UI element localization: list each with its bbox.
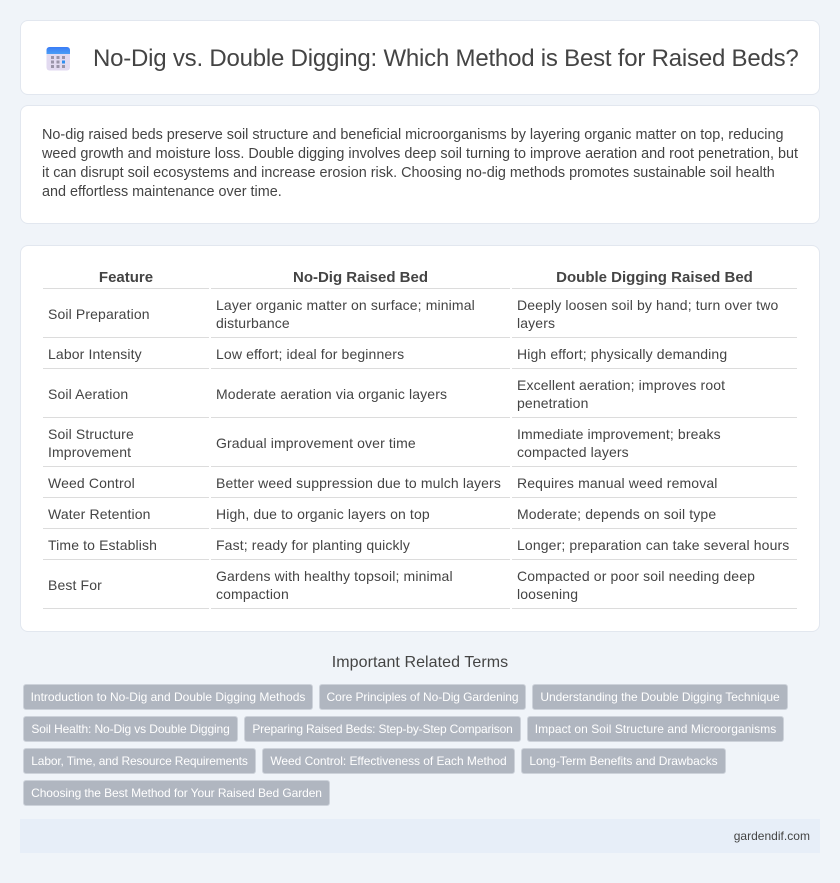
chip: Soil Health: No-Dig vs Double Digging [31, 722, 230, 736]
comparison table: Gradual improvement over time [216, 435, 416, 451]
comparison table: Longer; preparation can take several hours [517, 537, 789, 553]
chip [23, 716, 238, 742]
intro paragraph: it can disrupt soil ecosystems and increase erosion risk. Choosing no-dig methods promotes sustainable soil health [42, 165, 775, 181]
chip: Preparing Raised Beds: Step-by-Step Comparison [252, 722, 513, 736]
row: Soil Structure Improvement [48, 426, 134, 460]
row: Water Retention: Water Retention [48, 506, 151, 522]
chip: Understanding the Double Digging Technique [540, 690, 780, 704]
comparison table: compaction [216, 586, 289, 602]
intro card [20, 105, 820, 224]
comparison table: Immediate improvement; breaks [517, 426, 721, 442]
chip: Long-Term Benefits and Drawbacks [529, 754, 718, 768]
comparison table: Requires manual weed removal [517, 475, 718, 491]
comparison table: Low effort; ideal for beginners [216, 346, 404, 362]
intro paragraph [42, 127, 798, 200]
row: Weed Control: Weed Control [48, 475, 135, 491]
header card [20, 20, 820, 95]
footer bar [20, 819, 820, 853]
comparison table: Compacted or poor soil needing deep [517, 568, 755, 584]
chip: Labor, Time, and Resource Requirements [31, 754, 248, 768]
comparison table [43, 269, 797, 609]
chip [244, 716, 521, 742]
comparison table: loosening [517, 586, 578, 602]
title: No-Dig vs. Double Digging: Which Method is Best for Raised Beds? [93, 45, 799, 72]
row: Soil Structure Improvement: Soil Structure [48, 426, 134, 442]
intro paragraph: weed growth and moisture loss. Double digging involves deep soil turning to improve aeration and root penetration, but [42, 146, 798, 162]
comparison table: Excellent aeration; improves root [517, 377, 725, 393]
chip: Core Principles of No-Dig Gardening [327, 690, 518, 704]
chip [532, 684, 788, 710]
intro paragraph: No-dig raised beds preserve soil structure and beneficial microorganisms by layering organic matter on top, reducing [42, 127, 783, 143]
column header: No-Dig Raised Bed: No-Dig Raised Bed [293, 269, 428, 286]
chip [23, 748, 256, 774]
comparison table: Deeply loosen soil by hand; turn over two [517, 297, 778, 313]
chip [319, 684, 526, 710]
column header: Feature: Feature [99, 269, 153, 286]
chip [262, 748, 515, 774]
row: Labor Intensity: Labor Intensity [48, 346, 142, 362]
row: Best For: Best For [48, 577, 102, 593]
comparison table: layers [517, 315, 555, 331]
chip [521, 748, 726, 774]
chip: Weed Control: Effectiveness of Each Method [270, 754, 507, 768]
chip [23, 684, 313, 710]
footer source: gardendif.com [734, 829, 810, 843]
comparison table: compacted layers [517, 444, 629, 460]
chip: Introduction to No-Dig and Double Digging Methods [31, 690, 305, 704]
icon: calendar [46, 47, 70, 70]
comparison table: Better weed suppression due to mulch layers [216, 475, 501, 491]
row: Soil Structure Improvement: Improvement [48, 444, 131, 460]
comparison table: penetration [517, 395, 588, 411]
comparison table: High, due to organic layers on top [216, 506, 430, 522]
intro paragraph: and effortless maintenance over time. [42, 184, 282, 200]
chip [23, 780, 330, 806]
row: Soil Aeration: Soil Aeration [48, 386, 128, 402]
comparison table: Moderate aeration via organic layers [216, 386, 447, 402]
comparison table: High effort; physically demanding [517, 346, 727, 362]
comparison table: Layer organic matter on surface; minimal [216, 297, 475, 313]
column header: Double Digging Raised Bed: Double Digging Raised Bed [556, 269, 753, 286]
related terms heading: Important Related Terms [332, 654, 508, 671]
row: Time to Establish: Time to Establish [48, 537, 157, 553]
table card [20, 245, 820, 632]
comparison table: disturbance [216, 315, 290, 331]
chip [527, 716, 784, 742]
row: Soil Preparation: Soil Preparation [48, 306, 150, 322]
chip: Choosing the Best Method for Your Raised Bed Garden [31, 786, 322, 800]
comparison table: Gardens with healthy topsoil; minimal [216, 568, 453, 584]
related terms chips [23, 684, 788, 806]
chip: Impact on Soil Structure and Microorganisms [535, 722, 776, 736]
comparison table: Fast; ready for planting quickly [216, 537, 410, 553]
comparison table: Moderate; depends on soil type [517, 506, 716, 522]
